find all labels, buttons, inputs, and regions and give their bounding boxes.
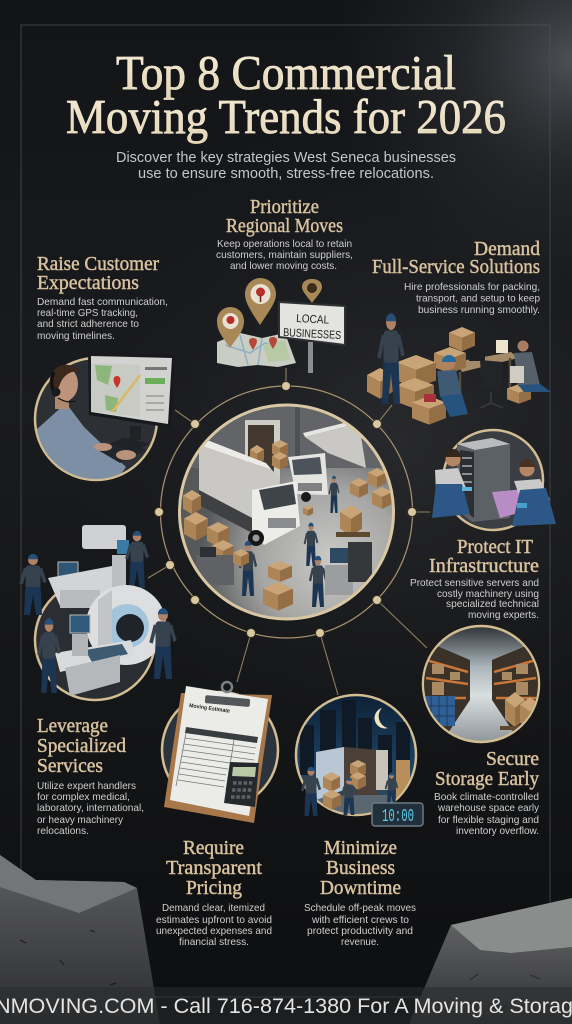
body: minimize business downtime: protect productivity and <box>307 925 413 937</box>
body: raise customer expectations: moving timelines. <box>37 330 115 342</box>
panel: minimize business downtime <box>296 695 423 948</box>
heading: minimize business downtime: Downtime <box>320 877 401 899</box>
heading: require transparent pricing: Pricing <box>186 877 242 899</box>
body: require transparent pricing: financial stress. <box>179 936 249 948</box>
icon: dispatcher at GPS monitor <box>34 356 172 482</box>
body: minimize business downtime: revenue. <box>341 936 379 948</box>
heading: demand full-service solutions: Full-Service Solutions <box>372 256 540 278</box>
title: Moving Trends for 2026 <box>66 89 506 144</box>
body: prioritize regional moves: customers, maintain suppliers, <box>216 249 353 261</box>
concrete rock right <box>409 898 572 1024</box>
title: Top 8 Commercial <box>116 45 456 100</box>
heading: minimize business downtime: Business <box>326 857 395 879</box>
heading: minimize business downtime <box>320 837 401 899</box>
icon: night-time truck loading with clock <box>296 695 423 827</box>
body: leverage specialized services: relocations. <box>37 825 89 837</box>
heading: raise customer expectations <box>37 253 159 294</box>
body: minimize business downtime: Schedule off-peak moves <box>304 902 416 914</box>
heading: leverage specialized services: Leverage <box>37 715 108 737</box>
panel: leverage specialized services <box>21 525 175 837</box>
icon: warehouse aisle with racks <box>423 626 540 745</box>
heading: leverage specialized services: Specialized <box>37 735 126 757</box>
body: leverage specialized services: or heavy machinery <box>37 814 124 826</box>
body: secure storage early: for flexible staging and <box>438 814 539 826</box>
icon: map with pins and local businesses sign <box>217 278 345 373</box>
icon: technicians handling a server rack <box>432 430 556 530</box>
heading: protect IT infrastructure: Infrastructure <box>429 555 539 577</box>
heading: raise customer expectations: Expectations <box>37 272 139 294</box>
panel: secure storage early <box>423 626 540 837</box>
icon: clipboard with moving estimate and calculator <box>162 682 278 823</box>
heading: leverage specialized services <box>37 715 126 777</box>
body: protect IT infrastructure <box>410 577 539 621</box>
icon: map with pins and local businesses sign: LOCAL <box>296 313 330 327</box>
title <box>66 45 506 144</box>
body: protect IT infrastructure: costly machinery using <box>437 588 539 600</box>
heading: prioritize regional moves <box>226 196 343 237</box>
heading: require transparent pricing: Require <box>183 837 244 859</box>
body: secure storage early: warehouse space early <box>437 802 540 814</box>
panel: raise customer expectations <box>35 253 175 490</box>
body: require transparent pricing: Demand clear, itemized <box>162 902 265 914</box>
heading: protect IT infrastructure: Protect IT <box>457 536 533 558</box>
heading: minimize business downtime: Minimize <box>324 837 397 859</box>
icon: medical and laboratory equipment with handlers <box>21 525 175 700</box>
heading: secure storage early: Storage Early <box>435 768 540 790</box>
concrete rock left <box>0 855 160 1024</box>
body: require transparent pricing: unexpected expenses and <box>156 925 272 937</box>
body: require transparent pricing <box>156 902 272 948</box>
body: leverage specialized services: Utilize expert handlers <box>37 780 136 792</box>
icon: digital clock: 10:00 <box>382 807 414 827</box>
body: require transparent pricing: estimates upfront to avoid <box>156 914 272 926</box>
footer banner <box>0 987 572 1024</box>
icon: map with pins and local businesses sign: BUSINESSES <box>283 327 342 342</box>
heading: require transparent pricing <box>166 837 262 899</box>
body: raise customer expectations: Demand fast communication, <box>37 296 168 308</box>
footer banner: NMOVING.COM - Call 716-874-1380 For A Moving & Storag <box>0 995 572 1018</box>
icon: clipboard with moving estimate and calculator: Moving Estimate <box>189 703 230 715</box>
body: raise customer expectations <box>37 296 168 342</box>
heading: demand full-service solutions <box>372 238 540 278</box>
body: demand full-service solutions <box>404 281 540 316</box>
heading: demand full-service solutions: Demand <box>474 238 540 260</box>
body: prioritize regional moves: and lower moving costs. <box>230 260 337 272</box>
connector ring and nodes <box>148 368 430 695</box>
central illustration: warehouse loading bay <box>178 400 395 620</box>
heading: require transparent pricing: Transparent <box>166 857 262 879</box>
body: demand full-service solutions: transport, and setup to keep <box>416 292 540 304</box>
body: leverage specialized services: laboratory, international, <box>37 802 144 814</box>
heading: prioritize regional moves: Regional Moves <box>226 215 343 237</box>
body: prioritize regional moves <box>216 238 353 272</box>
heading: secure storage early: Secure <box>486 748 539 770</box>
subtitle: use to ensure smooth, stress-free relocations. <box>138 165 434 182</box>
panel: prioritize regional moves <box>216 196 353 373</box>
body: minimize business downtime <box>304 902 416 948</box>
body: secure storage early <box>434 791 540 837</box>
heading: prioritize regional moves: Prioritize <box>250 196 319 218</box>
heading: protect IT infrastructure <box>429 536 539 577</box>
body: prioritize regional moves: Keep operations local to retain <box>217 238 352 250</box>
panel: protect IT infrastructure <box>410 430 556 621</box>
body: protect IT infrastructure: Protect sensitive servers and <box>410 577 539 589</box>
heading: secure storage early <box>435 748 540 790</box>
body: demand full-service solutions: Hire professionals for packing, <box>404 281 540 293</box>
heading: leverage specialized services: Services <box>37 755 103 777</box>
panel: demand full-service solutions <box>367 238 551 425</box>
panel: require transparent pricing <box>156 682 278 948</box>
body: leverage specialized services: for complex medical, <box>37 791 130 803</box>
subtitle: Discover the key strategies West Seneca businesses <box>116 149 456 166</box>
body: secure storage early: inventory overflow. <box>456 825 539 837</box>
body: protect IT infrastructure: specialized technical <box>446 598 539 610</box>
subtitle <box>116 149 456 182</box>
body: leverage specialized services <box>37 780 144 837</box>
body: raise customer expectations: real-time GPS tracking, <box>37 307 138 319</box>
body: protect IT infrastructure: moving experts. <box>468 609 539 621</box>
body: secure storage early: Book climate-controlled <box>434 791 539 803</box>
body: minimize business downtime: with efficient crews to <box>311 914 409 926</box>
body: raise customer expectations: and strict adherence to <box>37 318 139 330</box>
heading: raise customer expectations: Raise Customer <box>37 253 159 275</box>
body: demand full-service solutions: business running smoothly. <box>418 304 540 316</box>
icon: movers packing an office <box>367 313 551 425</box>
